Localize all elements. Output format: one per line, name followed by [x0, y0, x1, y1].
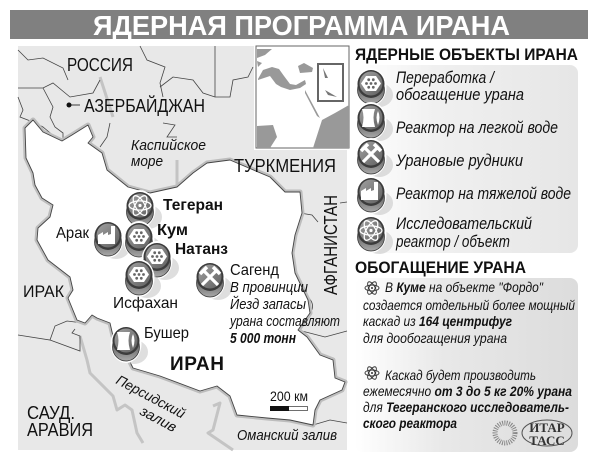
icon: light water reactor	[356, 102, 393, 141]
text: cascade output: для Тегеранского исследователь-	[363, 399, 569, 415]
legend text	[395, 69, 571, 251]
legend text: Реактор на легкой воде	[396, 119, 558, 137]
country labels	[23, 55, 341, 440]
logo: ITAR-TASS	[495, 420, 572, 448]
country labels: АРАВИЯ	[27, 420, 93, 440]
icon: Tehran	[124, 190, 162, 229]
uranium reserves note: Йезд запасы	[230, 295, 306, 313]
panel: enrichment	[355, 278, 578, 452]
icon: Qom	[124, 221, 161, 260]
country borders	[18, 46, 347, 425]
icon: bullet atom	[365, 280, 379, 296]
map panel	[18, 44, 351, 450]
scale bar: 200 км	[270, 388, 308, 404]
title: ЯДЕРНАЯ ПРОГРАММА ИРАНА	[93, 10, 510, 41]
country labels: ТУРКМЕНИЯ	[234, 156, 336, 176]
uranium reserves note: урана составляют	[229, 313, 340, 330]
sea labels: море	[131, 153, 163, 170]
icon: Bushehr	[110, 325, 148, 364]
city labels: Тегеран	[163, 197, 223, 214]
logo: ITAR-TASS: ТАСС	[529, 433, 565, 448]
shorelines	[80, 77, 233, 450]
country labels: ИРАК	[23, 282, 64, 301]
inset locator map	[254, 44, 351, 150]
text: cascade output: Каскад будет производить	[385, 367, 536, 383]
city labels	[56, 197, 280, 342]
city labels: Исфахан	[113, 295, 178, 312]
legend text: Реактор на тяжелой воде	[396, 185, 571, 203]
legend text: Урановые рудники	[395, 152, 523, 170]
text: Qom cascade: для дообогащения урана	[363, 330, 507, 346]
legend text: обогащение урана	[396, 86, 524, 104]
country labels: АЗЕРБАЙДЖАН	[84, 95, 205, 116]
scale bar	[270, 388, 308, 411]
city labels: Натанз	[175, 241, 228, 258]
city labels: Бушер	[144, 325, 189, 342]
country labels: РОССИЯ	[67, 55, 133, 75]
icon: research reactor	[356, 215, 393, 254]
legend text: Исследовательский	[396, 215, 532, 233]
city labels: Сагенд	[230, 262, 280, 279]
text: Qom cascade: каскад из 164 центрифуг	[363, 313, 512, 329]
text: Qom cascade: В Куме на объекте "Фордо"	[385, 279, 544, 295]
legend text: реактор / объект	[395, 233, 510, 251]
Iran shape	[25, 120, 345, 425]
uranium reserves note	[229, 279, 340, 347]
text: cascade output: ежемесячно от 3 до 5 кг 20% урана	[363, 383, 572, 399]
city labels: Арак	[56, 225, 90, 242]
icon: bullet atom	[365, 365, 379, 381]
legend text: Переработка /	[396, 69, 495, 87]
icon: Arak	[92, 220, 130, 259]
country labels: САУД.	[27, 403, 75, 423]
icon: Isfahan	[124, 259, 161, 298]
icon: Saghand	[194, 261, 232, 300]
logo: ITAR-TASS: ИТАР	[529, 420, 565, 435]
icon: enrichment	[356, 68, 393, 107]
heading: uranium enrichment: ОБОГАЩЕНИЕ УРАНА	[355, 258, 526, 277]
text: cascade output	[363, 367, 572, 431]
text: Qom cascade	[363, 279, 575, 346]
uranium reserves note: В провинции	[230, 279, 309, 296]
country labels: АФГАНИСТАН	[321, 195, 341, 295]
sea labels: залив	[137, 402, 180, 435]
icon: uranium mines	[356, 138, 393, 177]
uranium reserves note: 5 000 тонн	[230, 330, 296, 347]
sea labels: Каспийское	[131, 137, 206, 154]
country labels: ИРАН	[170, 354, 224, 375]
city labels: Кум	[157, 222, 188, 239]
sea labels: Оманский залив	[237, 428, 337, 444]
heading: nuclear sites: ЯДЕРНЫЕ ОБЪЕКТЫ ИРАНА	[355, 45, 578, 64]
text: cascade output: ского реактора	[363, 415, 457, 431]
panel: legend	[356, 65, 578, 254]
sea labels	[114, 137, 337, 444]
icon: Natanz	[142, 241, 179, 280]
sea labels: Персидский	[114, 372, 188, 421]
icon: heavy water reactor	[356, 176, 393, 215]
